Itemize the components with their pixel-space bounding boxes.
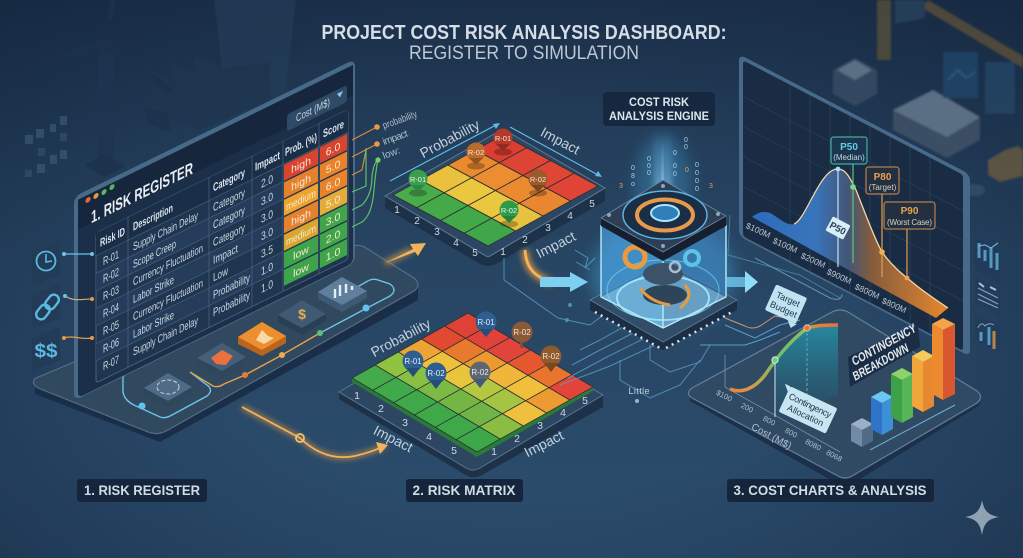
axis arrows xyxy=(390,123,602,181)
header row xyxy=(100,117,344,250)
gears xyxy=(625,247,699,308)
pin: R-02 green: R-02 xyxy=(501,206,517,215)
binary stream: 8 xyxy=(631,173,635,180)
pin: R-01 blue left: R-01 xyxy=(404,357,422,366)
header row: Risk ID xyxy=(100,224,125,250)
pin: R-02 orange xyxy=(466,142,486,170)
binary stream: o xyxy=(631,181,635,188)
pin: R-02 orange: R-02 xyxy=(468,148,484,157)
chip: risk map xyxy=(197,343,246,378)
pin: R-01 blue left xyxy=(402,350,424,377)
binary stream: 0 xyxy=(684,144,688,151)
small label: little: Little xyxy=(628,386,650,396)
pin: R-02 blue xyxy=(426,362,446,389)
side numbers: 2 xyxy=(378,403,384,415)
binary stream: 3 xyxy=(619,183,623,190)
callout: P90 worst case: (Worst Case) xyxy=(887,218,932,227)
tag: P50: P50 xyxy=(827,220,848,238)
section label: cost charts and analysis xyxy=(727,479,934,502)
binary stream: 0 xyxy=(685,167,689,174)
engine glow xyxy=(591,220,735,330)
callout: P50 median xyxy=(831,137,867,164)
id, description, category, impact text: Low xyxy=(213,264,228,284)
dropdown: cost xyxy=(287,85,347,131)
right side mini icons xyxy=(975,237,1000,352)
prob and score labels: medium xyxy=(286,188,316,214)
legend connectors: probability, impact, low: low: xyxy=(381,145,402,162)
id, description, category, impact text: R-01 xyxy=(103,247,119,268)
panel: contingency platform xyxy=(688,310,980,486)
score cells xyxy=(320,134,347,268)
id, description, category, impact text: Labor Strike xyxy=(133,308,174,341)
header row: Description xyxy=(133,201,173,234)
axis labels: 800 xyxy=(784,426,799,440)
callout: P50 median: P50 xyxy=(840,142,858,153)
section label: risk register: 1. RISK REGISTER xyxy=(84,482,200,498)
prob and score labels: 2.0 xyxy=(326,228,340,247)
x axis labels xyxy=(744,220,908,315)
pin: R-01 green xyxy=(408,170,428,196)
prob and score labels: medium xyxy=(286,223,316,249)
id, description, category, impact text: 3.0 xyxy=(261,207,273,226)
id, description, category, impact text: R-04 xyxy=(103,300,119,321)
callout: target budget: Budget xyxy=(768,299,799,320)
bar: blue xyxy=(871,391,893,435)
id, description, category, impact text: 3.5 xyxy=(261,242,273,261)
background: construction scene right xyxy=(833,0,1023,196)
pin: R-02 brown xyxy=(528,170,548,196)
binary stream: 0 xyxy=(673,171,677,178)
title: PROJECT COST RISK ANALYSIS DASHBOARD: xyxy=(322,22,726,44)
pin: R-01 blue top xyxy=(476,312,496,337)
dropdown: cost: Cost (M$) xyxy=(296,96,330,125)
prob and score labels: 3.0 xyxy=(326,211,340,229)
side numbers: 2 xyxy=(522,235,528,246)
axis labels xyxy=(368,315,566,460)
callout: P80 target: (Target) xyxy=(869,183,897,192)
pin: R-02 brown top: R-02 xyxy=(513,328,531,337)
matrix base xyxy=(339,316,603,477)
icon: mini chart xyxy=(975,313,1000,352)
x axis labels: $800M xyxy=(853,281,881,301)
id, description, category, impact text: R-05 xyxy=(103,317,119,338)
platform chip buttons xyxy=(144,277,367,408)
section label: risk matrix: 2. RISK MATRIX xyxy=(412,482,516,498)
distribution area xyxy=(752,169,948,318)
prob and score labels: low xyxy=(293,261,310,280)
curve xyxy=(730,325,838,391)
panel: risk register monitor xyxy=(74,59,355,401)
heatmap grid xyxy=(352,313,593,452)
heatmap grid xyxy=(393,135,598,246)
legend connectors: probability, impact, low: probability xyxy=(381,109,419,132)
callout: target budget xyxy=(762,284,808,330)
section label: risk matrix xyxy=(406,479,523,502)
side numbers: 1 xyxy=(491,446,497,458)
icon: sparkle xyxy=(965,500,999,535)
id, description, category, impact text: Currency Fluctuation xyxy=(133,276,203,324)
callout: P80 target: P80 xyxy=(874,172,892,183)
axis labels: Probability xyxy=(368,315,433,360)
engine heading: COST RISK xyxy=(629,97,690,109)
background: construction scene left xyxy=(25,0,296,177)
id, description, category, impact text: Category xyxy=(213,185,246,214)
callout: P80 target xyxy=(866,167,899,194)
engine heading xyxy=(603,92,715,126)
id, description, category, impact text: 3.0 xyxy=(261,224,273,243)
chip: orange workflow xyxy=(238,322,286,356)
prob and score labels xyxy=(286,141,340,284)
binary stream: 0 xyxy=(695,170,699,177)
pin: R-01 red: R-01 xyxy=(495,134,511,143)
callout: contingency allocation: Contingency xyxy=(787,391,834,420)
pin: R-02 grey: R-02 xyxy=(471,368,489,377)
prob and score labels: 6.0 xyxy=(326,141,340,159)
side numbers: 4 xyxy=(567,211,573,222)
bar: grey xyxy=(851,418,873,447)
matrix base xyxy=(385,129,605,266)
pin: R-02 blue: R-02 xyxy=(427,369,445,378)
x axis labels: $100M xyxy=(771,235,799,255)
x axis labels: $200M xyxy=(799,250,827,270)
x axis labels: $800M xyxy=(880,295,908,315)
binary stream: 0 xyxy=(695,162,699,169)
side numbers: 5 xyxy=(582,395,588,407)
callout: contingency allocation xyxy=(773,384,837,434)
title: REGISTER TO SIMULATION xyxy=(409,43,639,64)
prob and score labels: 5.0 xyxy=(326,158,340,177)
side numbers: 5 xyxy=(589,199,595,210)
left icon: dollars: $$ xyxy=(34,341,58,362)
pin: R-01 red xyxy=(494,128,512,156)
binary stream: 0 xyxy=(631,165,635,172)
id, description, category, impact text: 1.0 xyxy=(261,259,273,278)
side numbers: 2 xyxy=(414,216,420,227)
side numbers: 4 xyxy=(560,407,566,419)
table: risk register rows xyxy=(96,109,348,383)
side numbers: 4 xyxy=(453,238,459,249)
distribution curve xyxy=(794,169,948,308)
side numbers: 1 xyxy=(500,247,506,258)
axis labels: 200 xyxy=(740,401,755,415)
circuit lines: engine to charts xyxy=(700,215,842,345)
id, description, category, impact text: 1.0 xyxy=(261,277,273,296)
legend connectors: probability, impact, low: impact xyxy=(381,129,410,148)
callout: P50 median: (Median) xyxy=(833,153,865,162)
engine heading: ANALYSIS ENGINE xyxy=(609,111,709,123)
arrow: matrix to engine xyxy=(525,250,588,292)
id, description, category, impact text: Category xyxy=(213,203,246,232)
chart: S-curve contingency xyxy=(715,325,844,464)
teal area xyxy=(775,325,838,420)
section label: risk register xyxy=(77,479,207,502)
prob and score labels: high xyxy=(291,208,311,229)
small label: little xyxy=(628,386,650,403)
axis labels: 800 xyxy=(762,414,777,428)
axis labels: Impact xyxy=(538,124,583,158)
marker lines xyxy=(836,164,909,280)
bar: green xyxy=(891,368,913,423)
left icon: dollars xyxy=(32,327,94,371)
chip: dollar xyxy=(278,300,326,335)
x axis labels: $900M xyxy=(825,266,853,286)
id, description, category, impact text: Labor Strike xyxy=(133,273,174,306)
callout: P90 worst case xyxy=(884,202,935,229)
bar: orange red xyxy=(932,318,955,400)
side numbers: 2 xyxy=(514,433,520,445)
left icon: clock xyxy=(32,241,94,286)
binary stream xyxy=(619,137,713,193)
x axis labels: $100M xyxy=(744,220,772,240)
side numbers: 3 xyxy=(545,223,551,234)
prob and score labels: 5.0 xyxy=(326,193,340,212)
id, description, category, impact text: Category xyxy=(213,220,246,249)
side numbers: 5 xyxy=(451,445,457,457)
axis labels: Impact xyxy=(533,228,578,261)
id, description, category, impact text: R-06 xyxy=(103,335,119,356)
binary stream: 0 xyxy=(647,170,651,177)
arrow: engine to charts xyxy=(727,271,758,293)
axis labels xyxy=(417,116,583,261)
pin: R-02 brown top xyxy=(512,322,532,348)
circuit lines on platform xyxy=(121,279,394,418)
id, description, category, impact text xyxy=(103,172,273,373)
header row: Prob. (%) xyxy=(285,130,317,159)
section label: cost charts and analysis: 3. COST CHARTS & ANALYSIS xyxy=(734,482,926,498)
id, description, category, impact text: Currency Fluctuation xyxy=(133,241,203,289)
prob cells xyxy=(284,148,318,286)
chip: bars xyxy=(318,277,367,312)
icon: mini bar chart xyxy=(975,237,1000,283)
header row: Category xyxy=(213,165,245,194)
side numbers: 1 xyxy=(354,390,360,402)
side numbers: 5 xyxy=(472,248,478,259)
title xyxy=(322,22,726,64)
callout: P90 worst case: P90 xyxy=(901,206,919,217)
id, description, category, impact text: Probability xyxy=(213,288,251,319)
binary stream: 3 xyxy=(709,183,713,190)
label: contingency breakdown: CONTINGENCY xyxy=(850,321,918,369)
arrow: register to bottom matrix xyxy=(242,407,388,457)
window dots xyxy=(85,183,115,204)
axis labels: Cost (M$) xyxy=(749,422,793,452)
prob and score labels: low xyxy=(293,243,310,263)
glass column xyxy=(601,225,726,328)
pin: R-01 blue top: R-01 xyxy=(477,318,495,327)
id, description, category, impact text: Impact xyxy=(213,241,238,267)
binary stream: 0 xyxy=(695,178,699,185)
engine lid xyxy=(601,180,726,261)
bar: amber xyxy=(912,350,934,412)
chart: contingency bars xyxy=(851,318,955,450)
pin: R-02 brown right xyxy=(540,346,562,372)
pin: R-02 grey xyxy=(470,362,490,388)
header row: Impact xyxy=(255,148,280,174)
legend connectors: probability, impact, low xyxy=(352,109,419,227)
callout: target budget: Target xyxy=(775,290,802,309)
side numbers: 3 xyxy=(434,227,440,238)
panel: top risk matrix xyxy=(385,116,605,266)
left icon: chain link xyxy=(32,284,94,329)
chip: dollar: $ xyxy=(298,306,306,322)
id, description, category, impact text: 2.0 xyxy=(261,172,273,191)
panel: bottom risk matrix xyxy=(339,312,603,477)
tag: P50 xyxy=(825,216,851,240)
side numbers xyxy=(354,390,588,458)
side numbers: 3 xyxy=(402,417,408,429)
binary stream: 0 xyxy=(673,163,677,170)
axis xyxy=(725,355,840,452)
axis labels xyxy=(715,388,844,464)
axis labels: Probability xyxy=(417,116,482,161)
id, description, category, impact text: R-07 xyxy=(103,352,119,373)
heatmap grid side thickness xyxy=(352,378,593,457)
pin: R-02 green xyxy=(500,200,518,228)
light beam xyxy=(635,130,691,235)
panel: risk register platform xyxy=(33,245,418,442)
pin: R-02 brown right: R-02 xyxy=(542,352,560,361)
prob and score labels: high xyxy=(291,155,311,176)
id, description, category, impact text: Supply Chain Delay xyxy=(133,208,199,254)
circuit lines: matrix to engine xyxy=(504,250,710,398)
pin: R-01 green: R-01 xyxy=(410,175,426,184)
axis labels: 8080 xyxy=(804,437,823,453)
header row: Score xyxy=(323,117,344,141)
panel: cost distribution monitor xyxy=(739,54,970,356)
side numbers xyxy=(394,199,595,259)
heading: 1. risk register: 1. RISK REGISTER xyxy=(91,158,193,227)
prob and score labels: 6.0 xyxy=(326,176,340,194)
pin: R-02 brown: R-02 xyxy=(530,175,546,184)
axis labels: $100 xyxy=(715,388,734,404)
binary stream: 0 xyxy=(695,186,699,193)
binary stream: 0 xyxy=(684,137,688,144)
icon: mini list xyxy=(975,277,1000,315)
arrow: register to top matrix xyxy=(385,243,426,263)
engine base xyxy=(590,262,737,350)
id, description, category, impact text: R-02 xyxy=(103,265,119,286)
binary stream: 0 xyxy=(647,163,651,170)
binary stream: 0 xyxy=(647,156,651,163)
id, description, category, impact text: Supply Chain Delay xyxy=(133,313,199,359)
axis labels: Impact xyxy=(521,427,566,460)
binary stream: 0 xyxy=(673,150,677,157)
prob and score labels: high xyxy=(291,173,311,194)
axis labels: Impact xyxy=(371,422,416,455)
side numbers: 1 xyxy=(394,205,400,216)
id, description, category, impact text: 3.0 xyxy=(261,189,273,208)
id, description, category, impact text: Probability xyxy=(213,270,251,302)
chip: clock xyxy=(144,373,192,408)
prob and score labels: 1.0 xyxy=(326,246,340,264)
side numbers: 4 xyxy=(426,431,432,443)
panel: cost risk analysis engine xyxy=(590,92,737,350)
callout: contingency allocation: Allocation xyxy=(786,403,825,428)
id, description, category, impact text: Scope Creep xyxy=(133,237,176,271)
side numbers: 3 xyxy=(537,420,543,432)
axis labels: 8068 xyxy=(825,448,844,464)
label: contingency breakdown: BREAKDOWN xyxy=(851,341,910,384)
id, description, category, impact text: R-03 xyxy=(103,282,119,303)
